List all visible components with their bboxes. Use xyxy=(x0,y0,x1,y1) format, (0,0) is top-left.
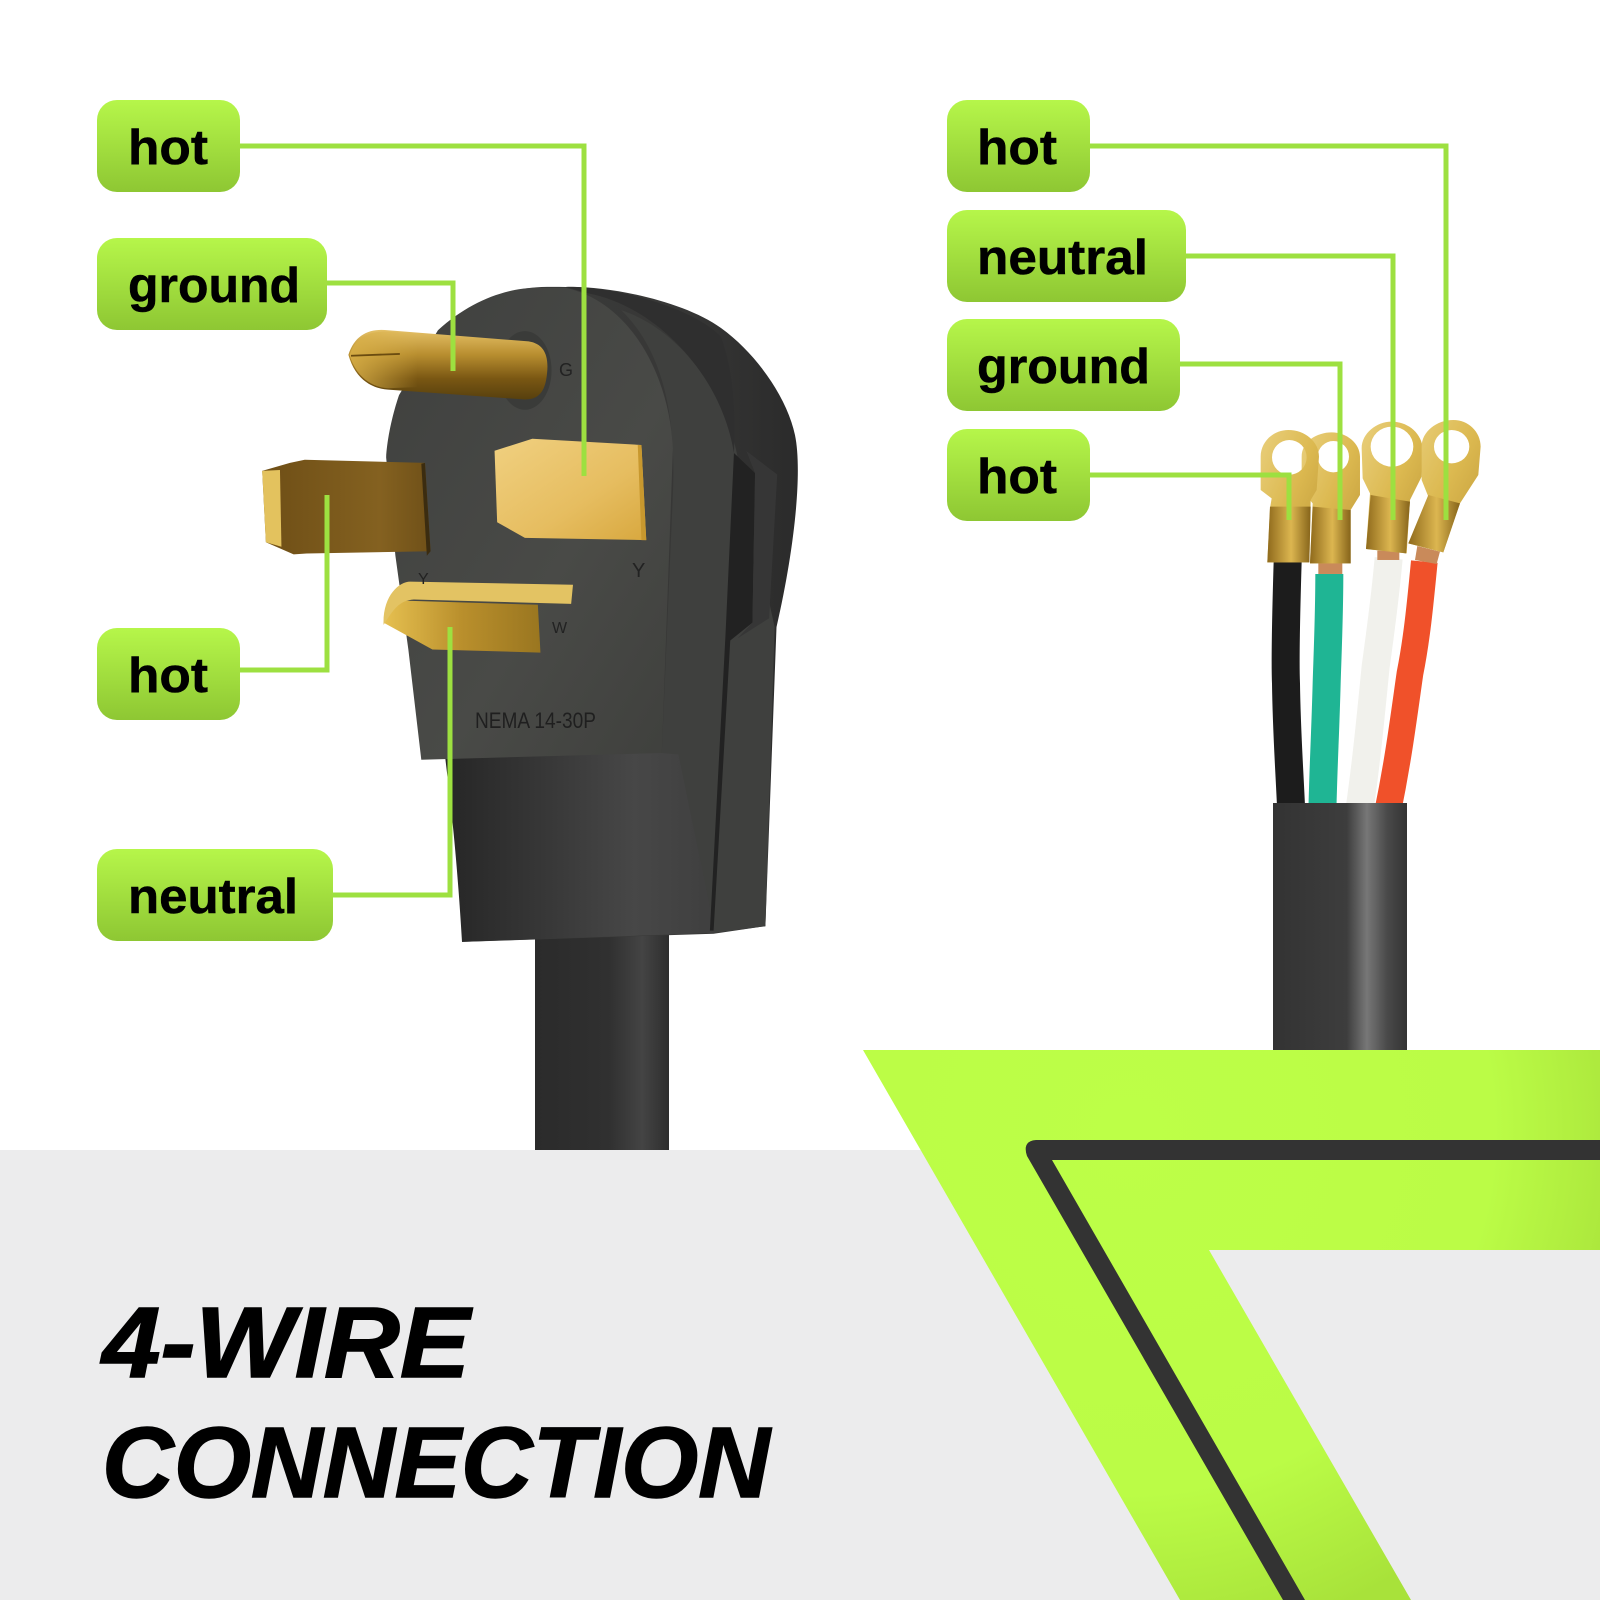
plug rear silhouette xyxy=(462,287,798,942)
side grip tab xyxy=(738,451,777,638)
orange wire xyxy=(1387,562,1424,813)
label: ground (wire): ground xyxy=(977,340,1150,394)
heading: 4-wire connection: 4-WIRE xyxy=(100,1287,473,1399)
leader lines: wires xyxy=(1090,146,1446,520)
label: hot (wire lower) xyxy=(947,429,1090,521)
plug embossed marks: G xyxy=(559,360,573,380)
label: hot (wire lower): hot xyxy=(977,450,1057,504)
white wire xyxy=(1359,558,1389,813)
plug collar xyxy=(445,752,715,942)
green wire xyxy=(1322,574,1329,813)
illustration: NEMA 14-30P plug xyxy=(262,287,798,942)
label: neutral (wire): neutral xyxy=(977,231,1148,285)
label: ground (plug) xyxy=(97,238,327,330)
label: hot (wire top) xyxy=(947,100,1090,192)
label: hot (plug top) xyxy=(97,100,240,192)
leader lines: plug xyxy=(240,146,584,895)
plug embossed marks: Y xyxy=(418,571,429,588)
terminal 3 xyxy=(1362,422,1423,553)
label: hot (wire top): hot xyxy=(977,121,1057,175)
label: hot (plug lower) xyxy=(97,628,240,720)
wire sheath xyxy=(1273,803,1407,1055)
label: neutral (plug): neutral xyxy=(128,870,298,924)
dark top band xyxy=(566,287,734,453)
terminal 1 xyxy=(1261,430,1319,562)
plug side panel xyxy=(621,310,775,933)
label: neutral (plug) xyxy=(97,849,333,941)
plug face xyxy=(386,288,673,760)
illustration: stripped wires with ring terminals xyxy=(1261,420,1481,813)
side grip groove xyxy=(710,453,755,931)
label: hot (plug lower): hot xyxy=(128,649,208,703)
label: hot (plug top): hot xyxy=(128,121,208,175)
terminal 4 xyxy=(1408,420,1481,552)
lime chevron shape xyxy=(863,1050,1600,1600)
terminal 2 xyxy=(1302,432,1360,563)
copper strands xyxy=(1318,546,1440,574)
label: neutral (wire) xyxy=(947,210,1186,302)
heading: 4-wire connection xyxy=(100,1287,772,1519)
left hot blade xyxy=(262,460,431,556)
plug embossed marks: NEMA 14-30P xyxy=(475,708,596,733)
plug embossed marks: W xyxy=(552,620,568,637)
label: ground (plug): ground xyxy=(128,259,300,313)
grey footer panel xyxy=(0,1150,1600,1600)
plug cord xyxy=(535,930,669,1155)
plug embossed marks xyxy=(418,360,645,733)
neutral blade xyxy=(384,582,573,653)
plug embossed marks: Y xyxy=(632,560,645,582)
heading: 4-wire connection: CONNECTION xyxy=(102,1407,772,1519)
dark chevron stripe xyxy=(1026,1140,1600,1600)
label: ground (wire) xyxy=(947,319,1180,411)
ground pin xyxy=(348,330,547,399)
black wire xyxy=(1286,562,1291,813)
ground pin socket ring xyxy=(498,331,552,410)
right hot blade xyxy=(495,439,646,540)
